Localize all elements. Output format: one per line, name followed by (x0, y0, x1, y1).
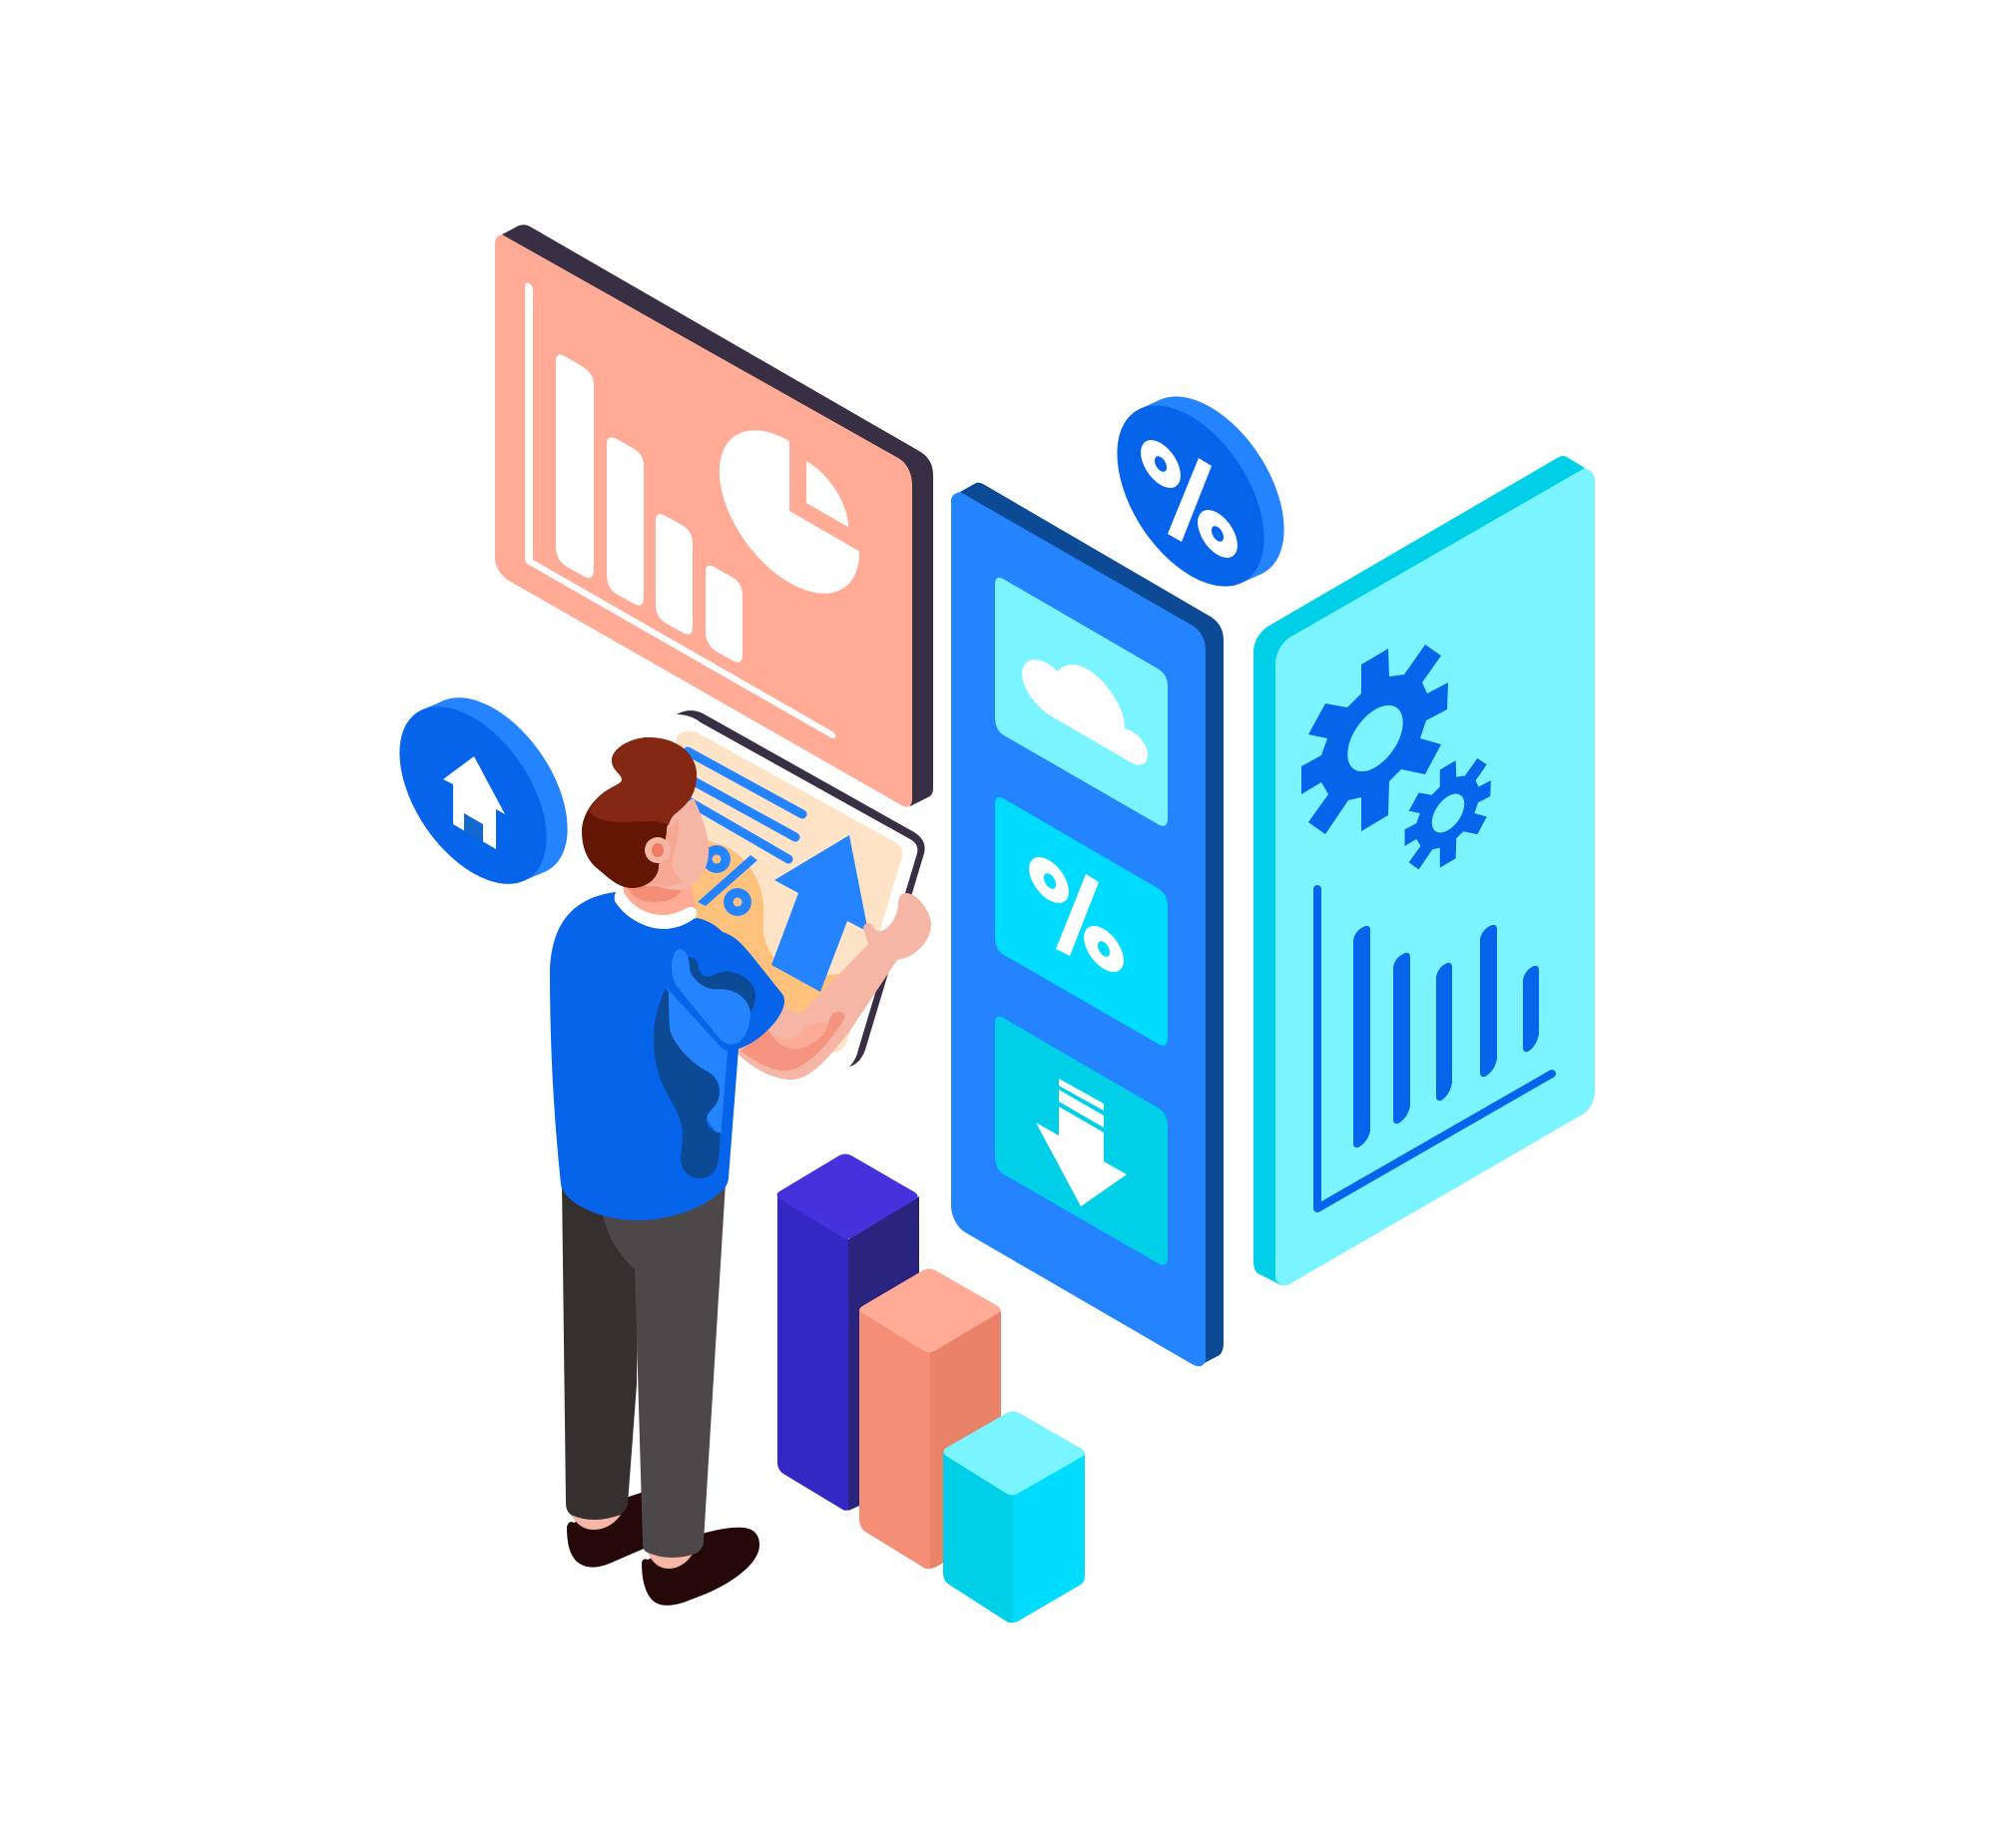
icon: small gear (1405, 758, 1491, 869)
front leg (599, 1182, 726, 1558)
bar 4 (706, 566, 743, 663)
hair (582, 737, 697, 888)
torso dark fold (654, 988, 721, 1178)
shirt arm fold (672, 949, 750, 1045)
card: download arrow (995, 1017, 1168, 1265)
icon: percent coin (1117, 365, 1284, 619)
pie chart large slice (720, 401, 859, 624)
board edge (1253, 456, 1585, 1285)
big up arrow (771, 835, 868, 992)
icon: large gear (1301, 645, 1448, 834)
back ankle (571, 1515, 621, 1530)
face shade (649, 818, 683, 886)
bar chart (1317, 889, 1552, 1208)
tablet screen (676, 731, 902, 1053)
tablet frame (677, 710, 925, 1067)
ear (645, 837, 671, 863)
icon: cloud (1022, 660, 1148, 765)
arm (735, 893, 931, 1080)
card: percent (995, 797, 1168, 1046)
axis (525, 283, 835, 738)
bar 3 (656, 514, 693, 635)
board face (495, 234, 912, 807)
shirt dark fold (689, 957, 755, 1012)
column: salmon (859, 1269, 1001, 1569)
bar 2 (607, 437, 644, 606)
face (644, 798, 709, 890)
card: cloud (995, 578, 1168, 826)
collar (615, 892, 697, 929)
board face (951, 492, 1206, 1366)
column: purple (776, 1154, 919, 1511)
arm highlight (768, 1023, 828, 1049)
column: cyan (943, 1411, 1085, 1622)
text lines (688, 751, 802, 859)
board face (1275, 468, 1595, 1285)
icon: percent sign (1029, 848, 1124, 980)
back shoe (567, 1492, 644, 1568)
neck (624, 883, 697, 923)
panel: cyan gears and chart board (1253, 456, 1595, 1285)
pie chart small slice (806, 461, 848, 527)
board edge (502, 225, 933, 806)
arm shadow (741, 1012, 844, 1071)
tablet percent (698, 845, 757, 916)
icon: down arrow (1036, 1079, 1127, 1206)
person (550, 710, 931, 1606)
bar 1 (556, 354, 594, 578)
board edge (960, 483, 1224, 1365)
neck shadow (627, 886, 684, 902)
front shoe (642, 1528, 759, 1606)
panel: blue card board (951, 483, 1224, 1366)
icon: up arrow coin (399, 667, 568, 916)
torso light strip (666, 987, 728, 1138)
orange blob (679, 840, 839, 1018)
front ankle (646, 1549, 696, 1569)
shirt (550, 892, 784, 1220)
back leg (562, 1182, 639, 1520)
panel: salmon chart board (495, 225, 933, 807)
